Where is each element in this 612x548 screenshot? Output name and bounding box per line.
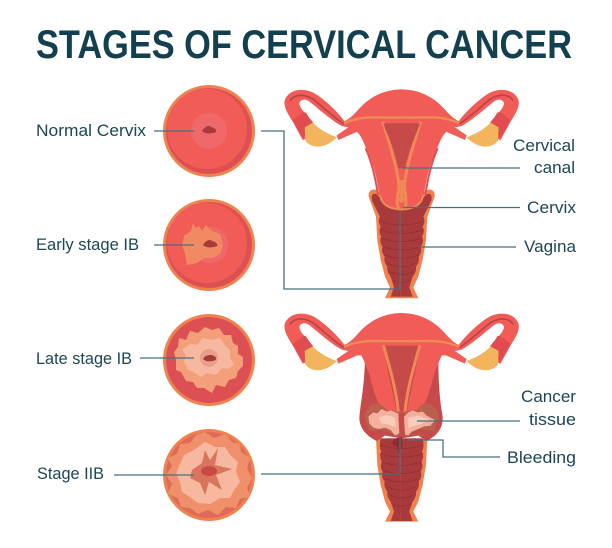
uterus wall xyxy=(359,355,443,441)
label: Stage IIB: Stage IIB xyxy=(37,464,104,483)
label: Bleeding: Bleeding xyxy=(507,448,576,467)
cervix: normal xyxy=(163,85,255,177)
cancer tissue xyxy=(368,409,399,436)
cervix: stage IIB xyxy=(163,429,255,521)
label: Normal Cervix: Normal Cervix xyxy=(36,121,147,140)
label: Cancer tissue xyxy=(521,387,576,429)
cervix: early stage IB xyxy=(163,199,255,291)
label: Cervical canal xyxy=(513,136,575,177)
label: Early stage IB: Early stage IB xyxy=(36,235,139,254)
label: Cervical canal: Cervical xyxy=(513,136,575,155)
tumor halo xyxy=(364,404,439,437)
label: Cancer tissue: tissue xyxy=(529,410,576,429)
label: Late stage IB: Late stage IB xyxy=(36,349,132,368)
label: Cervix: Cervix xyxy=(527,198,577,217)
organ: healthy uterus and vagina xyxy=(284,89,519,298)
leader lines xyxy=(114,131,520,475)
label: Cancer tissue: Cancer xyxy=(521,387,576,406)
label: Vagina: Vagina xyxy=(524,237,577,256)
bleeding xyxy=(392,437,403,453)
cervix: late stage IB xyxy=(163,314,255,406)
organ: uterus with cancer xyxy=(284,313,519,522)
label: Cervical canal: canal xyxy=(534,158,575,177)
